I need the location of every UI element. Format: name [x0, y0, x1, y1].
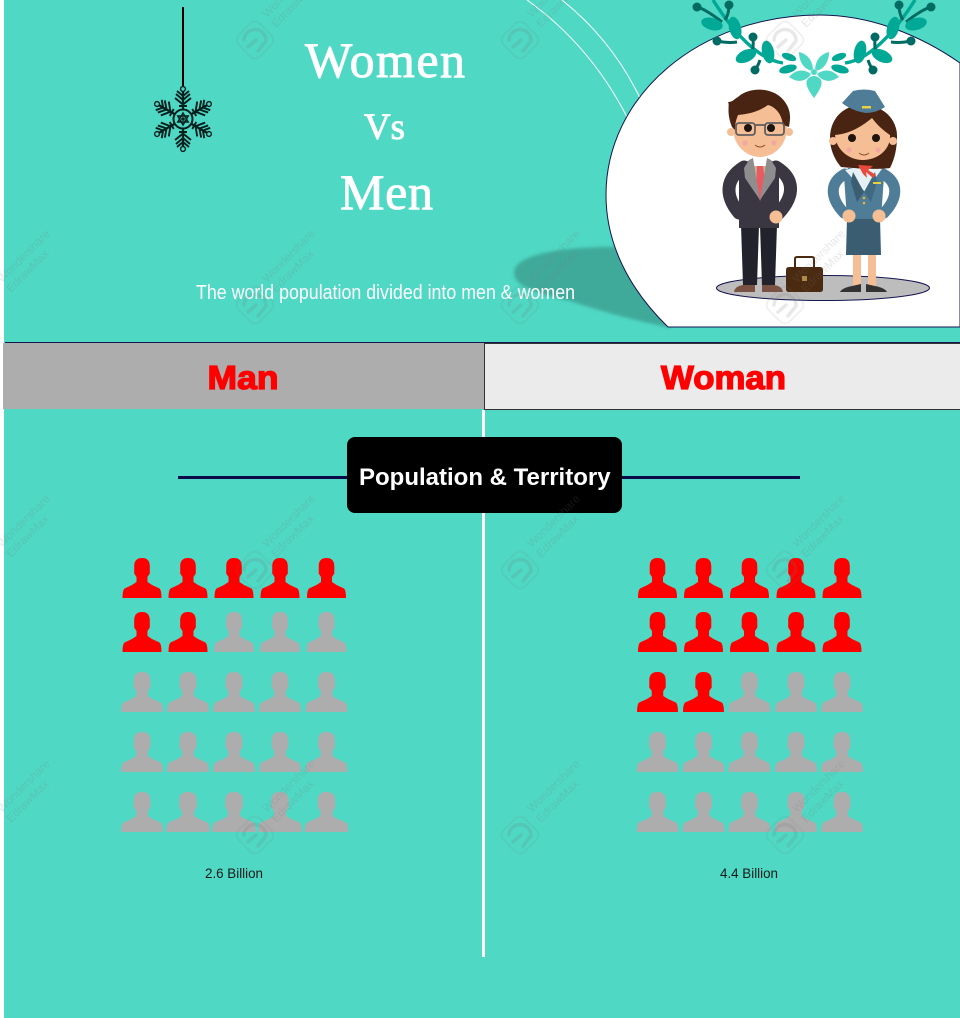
decorative white arcs [527, 0, 640, 117]
panel header: Woman [484, 344, 960, 410]
watermarks: Wondershare [526, 758, 583, 815]
watermarks: EdrawMax [5, 513, 52, 560]
watermarks: Wondershare [791, 758, 848, 815]
watermarks: Wondershare [526, 493, 583, 550]
woman figure [829, 90, 897, 292]
watermarks: EdrawMax [535, 513, 582, 560]
pictogram: men population [121, 558, 348, 832]
label: men count: 2.6 Billion [205, 865, 263, 881]
title: Women [305, 32, 465, 88]
title [305, 32, 465, 220]
watermarks: Wondershare [261, 228, 318, 285]
man figure [727, 90, 793, 292]
shadow under the globe [514, 247, 672, 328]
panel header: Man [3, 342, 960, 409]
watermarks [0, 0, 848, 856]
watermarks: Wondershare [791, 493, 848, 550]
watermarks: EdrawMax [270, 513, 317, 560]
watermarks: Wondershare [261, 493, 318, 550]
watermarks: Wondershare [526, 228, 583, 285]
globe panel with characters [606, 0, 960, 327]
pictogram: women population [637, 558, 863, 832]
watermarks: EdrawMax [5, 778, 52, 825]
subtitle: The world population divided into men & women [196, 282, 575, 304]
section heading: Population & Territory [178, 437, 800, 513]
watermarks: EdrawMax [800, 778, 847, 825]
icon: hanging snowflake [151, 7, 215, 151]
icon: briefcase [786, 257, 823, 292]
watermarks: EdrawMax [800, 513, 847, 560]
watermarks: EdrawMax [270, 778, 317, 825]
title: Vs [364, 107, 405, 148]
icon: laurel wreath [692, 0, 936, 98]
watermarks: Wondershare [791, 228, 848, 285]
title: Men [340, 164, 433, 220]
label: women count: 4.4 Billion [720, 865, 778, 881]
watermarks: EdrawMax [270, 248, 317, 295]
watermarks: Wondershare [261, 758, 318, 815]
watermarks: EdrawMax [5, 248, 52, 295]
panel header: Man: Man [208, 359, 278, 396]
watermarks: EdrawMax [800, 248, 847, 295]
centre divider [482, 410, 485, 957]
section heading: Population & Territory: Population & Territory [359, 464, 611, 491]
panel header: Woman: Woman [661, 359, 786, 396]
watermarks: EdrawMax [535, 778, 582, 825]
watermarks: EdrawMax [535, 248, 582, 295]
ground ellipse [716, 276, 930, 300]
